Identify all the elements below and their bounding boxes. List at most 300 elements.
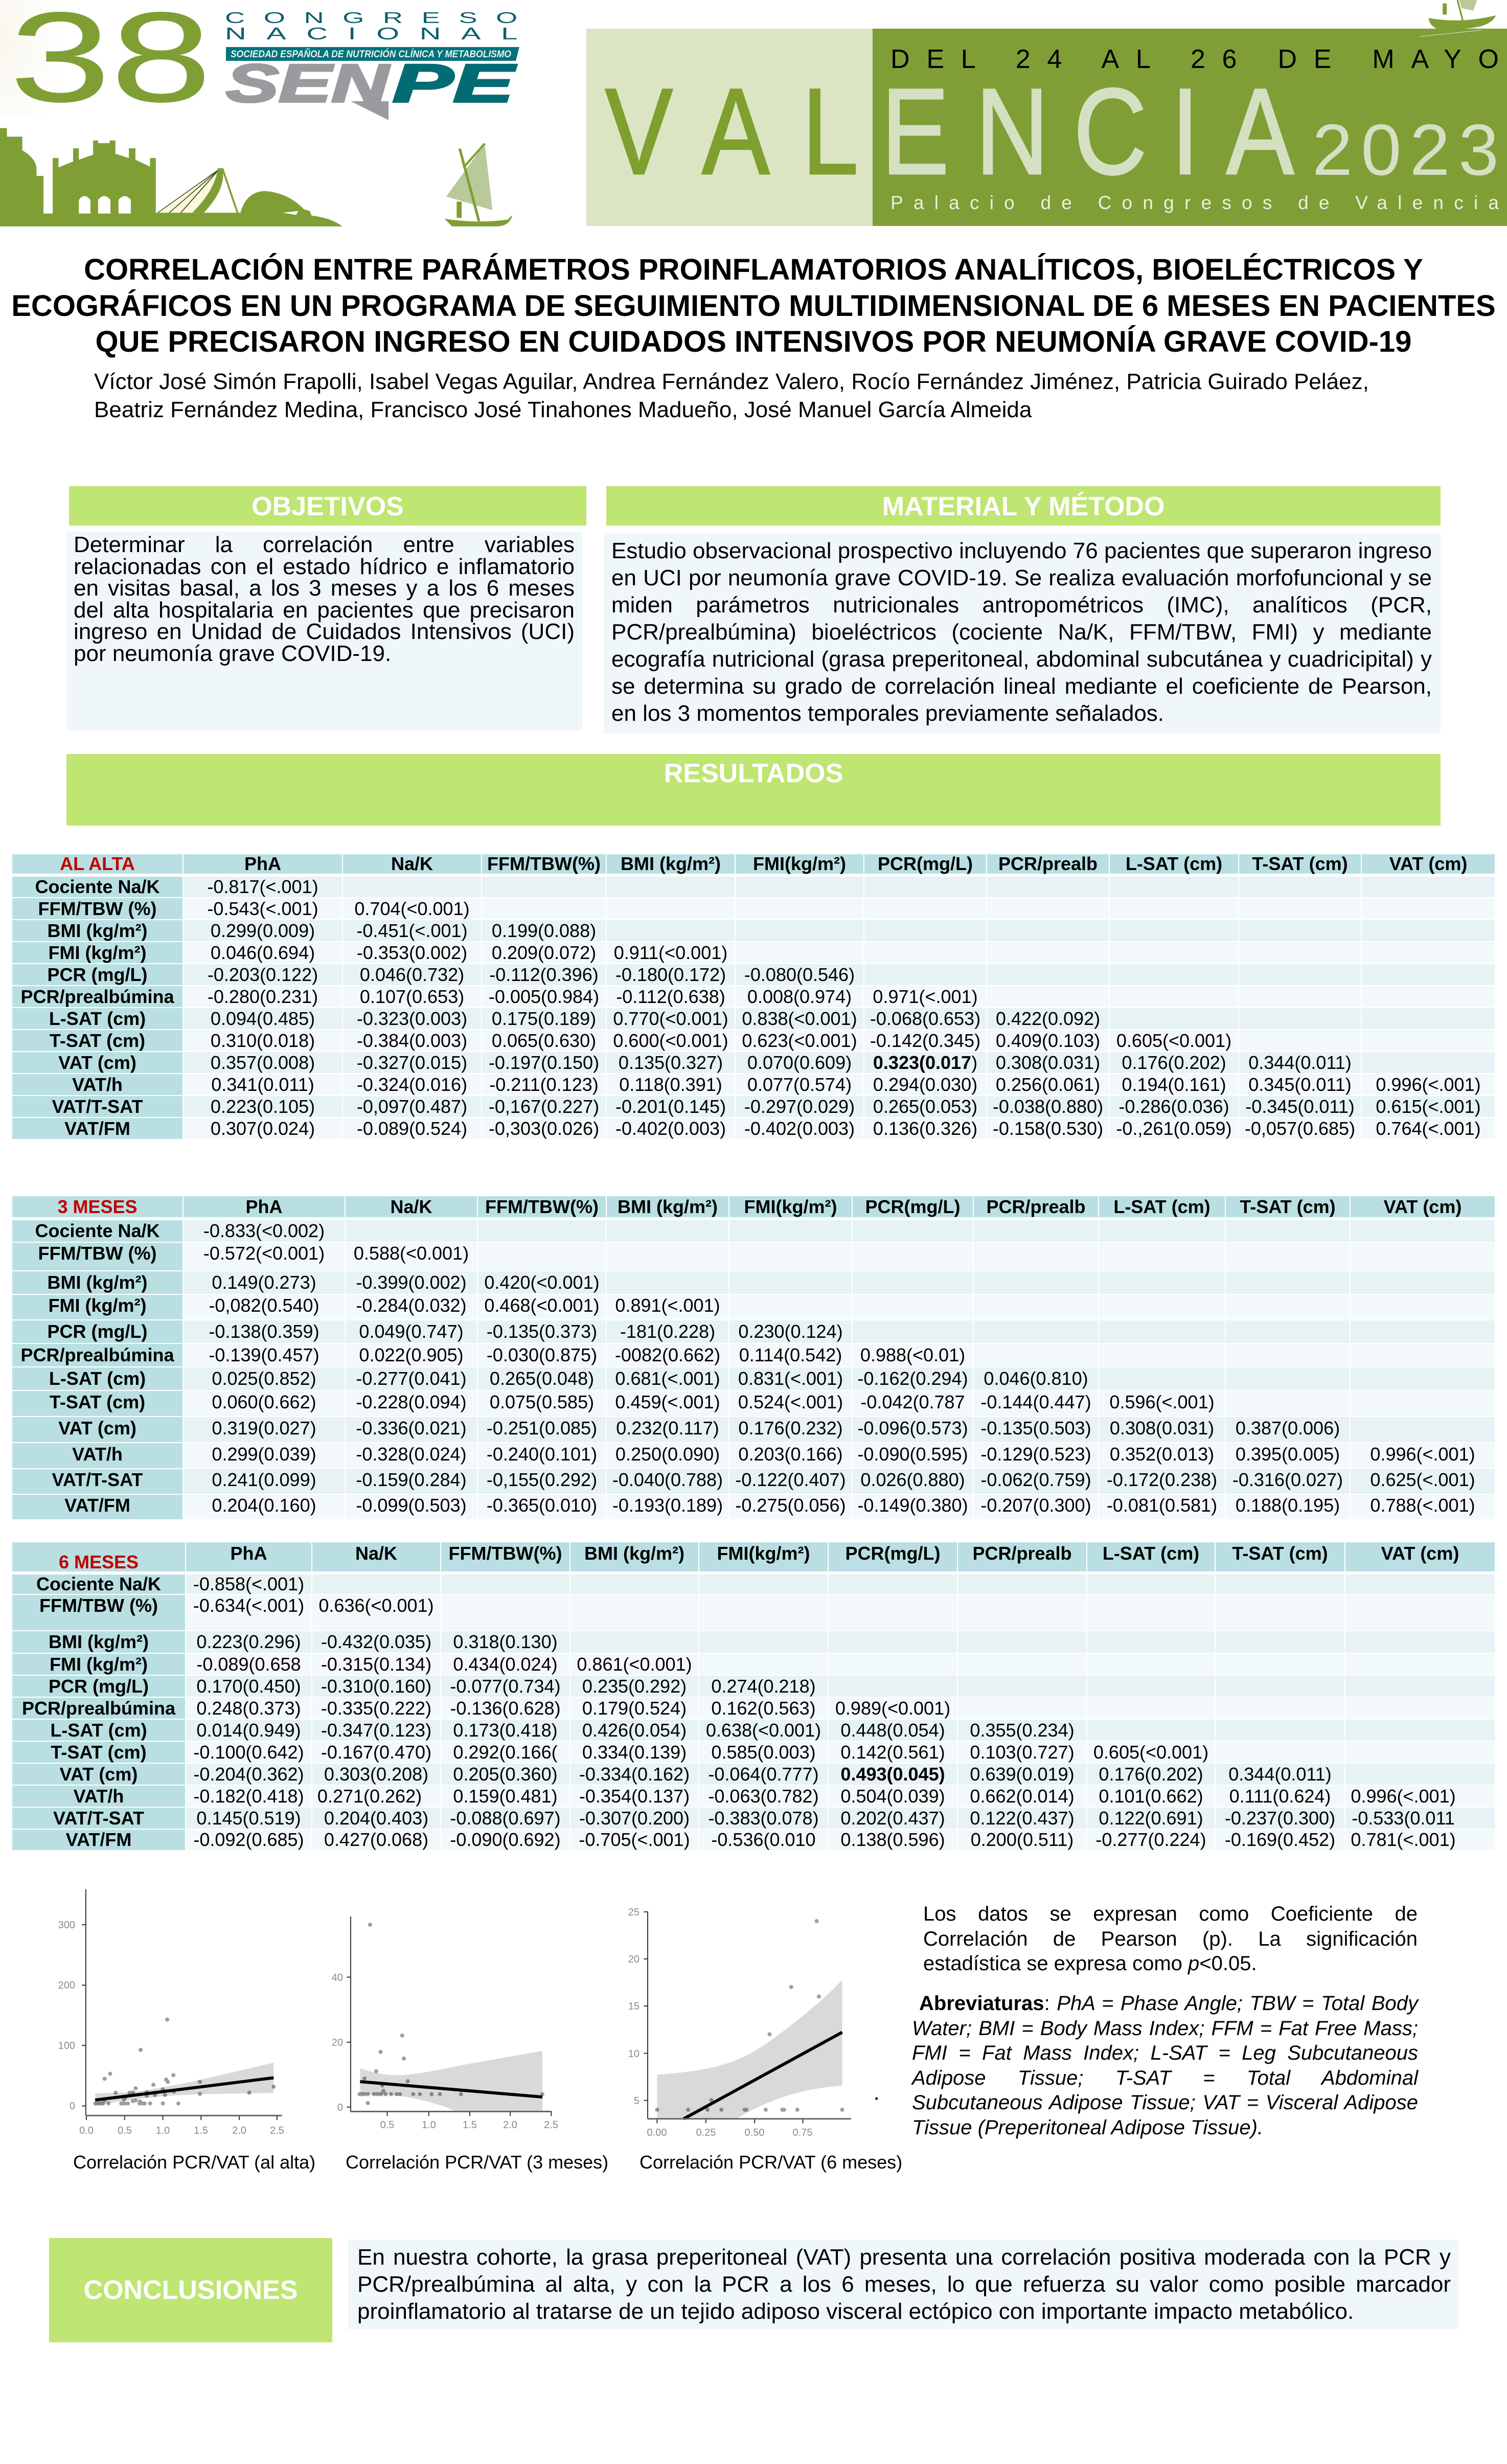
table: 6 meses: 0.638(<0.001) bbox=[706, 1720, 821, 1740]
panel: conclusiones text: En nuestra cohorte, la grasa preperitoneal (VAT) presenta una correlación positiva moderada con la PCR y bbox=[357, 2245, 1451, 2270]
table: 6 meses: -0.136(0.628) bbox=[450, 1697, 561, 1719]
table: al alta: 0.118(0.391) bbox=[619, 1074, 722, 1095]
chart: al alta: 2.5 bbox=[270, 2125, 284, 2136]
table: al alta: -0.817(<.001) bbox=[207, 876, 318, 897]
venue text: Palacio de Congresos de Valencia bbox=[890, 192, 1499, 213]
table: al alta: 0.256(0.061) bbox=[996, 1074, 1100, 1095]
table: 3 meses: 0.204(0.160) bbox=[212, 1495, 316, 1516]
table: 6 meses: -0.307(0.200) bbox=[579, 1808, 690, 1828]
table: 3 meses: -0.122(0.407) bbox=[735, 1469, 846, 1490]
table: 3 meses: 0.387(0.006) bbox=[1236, 1417, 1340, 1439]
table: 6 meses: VAT (cm) bbox=[1381, 1543, 1459, 1563]
table: 6 meses: 0.662(0.014) bbox=[970, 1785, 1075, 1807]
table: al alta: L-SAT (cm) bbox=[49, 1008, 146, 1029]
chart: al alta: 1.5 bbox=[194, 2125, 208, 2136]
panel: material y metodo text: en los 3 momentos temporales previamente señalados. bbox=[611, 701, 1164, 726]
table: 6 meses: 0.111(0.624) bbox=[1229, 1785, 1331, 1807]
table: 3 meses: -0.135(0.503) bbox=[980, 1417, 1091, 1439]
table: 6 meses: -0.237(0.300) bbox=[1225, 1808, 1335, 1828]
table: 6 meses: -0.705(<.001) bbox=[579, 1829, 690, 1850]
table: 3 meses: 0.114(0.542) bbox=[739, 1344, 842, 1365]
panel: material y metodo text: miden parámetros nutricionales antropométricos (IMC), analíticos (PCR, bbox=[611, 592, 1432, 618]
table: 3 meses: -0.062(0.759) bbox=[980, 1469, 1091, 1490]
table: 3 meses: 3 MESES bbox=[57, 1196, 138, 1217]
table: al alta: 0.971(<.001) bbox=[873, 986, 978, 1007]
table: 3 meses: -0.336(0.021) bbox=[356, 1417, 467, 1439]
table: 6 meses: 0.271(0.262) bbox=[317, 1785, 422, 1807]
table: al alta: FFM/TBW(%) bbox=[487, 853, 601, 874]
chart: 3 meses: 20 bbox=[332, 2037, 343, 2048]
table: 6 meses: PCR (mg/L) bbox=[49, 1676, 149, 1696]
chart caption: 6 meses: Correlación PCR/VAT (6 meses) bbox=[640, 2152, 902, 2173]
table: 3 meses: -0.172(0.238) bbox=[1107, 1469, 1217, 1490]
table: 6 meses: -0.077(0.734) bbox=[450, 1676, 561, 1696]
table: al alta: T-SAT (cm) bbox=[1252, 853, 1348, 874]
panel: material y metodo text: PCR/prealbúmina) bioeléctricos (cociente Na/K, FFM/TBW, FMI) y mediante bbox=[611, 620, 1432, 645]
table: al alta: VAT/h bbox=[72, 1074, 123, 1095]
table: 3 meses: -0,155(0.292) bbox=[487, 1469, 597, 1490]
chart: 3 meses: 0 bbox=[337, 2102, 343, 2113]
table: 6 meses: -0.090(0.692) bbox=[450, 1829, 561, 1850]
table: 3 meses: 0.459(<.001) bbox=[615, 1391, 720, 1412]
table: 3 meses: 0.230(0.124) bbox=[738, 1321, 843, 1342]
panel: objetivos text: del alta hospitalaria en pacientes que precisaron bbox=[74, 597, 575, 623]
note: abbreviations: Adipose Tissue; T-SAT = Total Abdominal bbox=[912, 2066, 1418, 2089]
table: al alta: -0.353(0.002) bbox=[357, 942, 467, 963]
table: al alta: -0.,261(0.059) bbox=[1116, 1117, 1232, 1139]
table: al alta: 0.070(0.609) bbox=[747, 1052, 852, 1073]
table: al alta: -0.038(0.880) bbox=[993, 1096, 1103, 1116]
VALENCIA title: VAL bbox=[605, 62, 858, 200]
table: 3 meses: 0.681(<.001) bbox=[615, 1368, 720, 1389]
chart: al alta: 1.0 bbox=[156, 2125, 170, 2136]
table: 6 meses: 6 MESES bbox=[59, 1551, 139, 1572]
table: al alta: -0,097(0.487) bbox=[357, 1096, 467, 1116]
table: 3 meses: 0.176(0.232) bbox=[738, 1417, 843, 1439]
note: data expression: Los datos se expresan como Coeficiente de bbox=[923, 1903, 1418, 1925]
table: 6 meses: VAT/FM bbox=[66, 1829, 131, 1850]
table: 6 meses: PhA bbox=[230, 1543, 267, 1563]
table: al alta: 0.422(0.092) bbox=[996, 1008, 1100, 1029]
table: al alta: 0.308(0.031) bbox=[996, 1052, 1100, 1073]
chart: 6 meses: 0.75 bbox=[793, 2127, 812, 2138]
table: al alta: -0,303(0.026) bbox=[489, 1117, 599, 1139]
table: 3 meses: VAT (cm) bbox=[58, 1417, 136, 1439]
table: al alta: -0.203(0.122) bbox=[208, 964, 318, 985]
table: 6 meses: -0.334(0.162) bbox=[579, 1764, 690, 1784]
table: 3 meses: 0.203(0.166) bbox=[738, 1444, 843, 1464]
table: 3 meses: -0.193(0.189) bbox=[612, 1495, 723, 1516]
chart: al alta: 0.5 bbox=[118, 2125, 132, 2136]
table: 6 meses: 0.334(0.139) bbox=[582, 1741, 687, 1763]
table: 6 meses: 0.138(0.596) bbox=[840, 1829, 945, 1850]
congreso nacional wordmark: CONGRESO bbox=[225, 9, 517, 27]
table: 6 meses: 0.303(0.208) bbox=[324, 1764, 428, 1784]
note: abbreviations bbox=[911, 1992, 1419, 2139]
SENPE logo bbox=[226, 54, 516, 120]
table: 3 meses: -0.099(0.503) bbox=[356, 1495, 467, 1516]
note: data expression bbox=[923, 1903, 1418, 1975]
table: 6 meses: -0.092(0.685) bbox=[193, 1829, 304, 1850]
table: 3 meses: 0.025(0.852) bbox=[212, 1368, 316, 1389]
table: al alta: 0.310(0.018) bbox=[211, 1030, 315, 1051]
table: 6 meses: Cociente Na/K bbox=[36, 1573, 161, 1594]
table: al alta: 0.107(0.653) bbox=[360, 986, 464, 1007]
table: al alta: -0.402(0.003) bbox=[615, 1117, 726, 1139]
table: 3 meses: T-SAT (cm) bbox=[50, 1391, 145, 1412]
table: al alta: 0.605(<0.001) bbox=[1116, 1030, 1231, 1051]
table: 6 meses: -0.063(0.782) bbox=[708, 1785, 819, 1807]
table: al alta: 0.341(0.011) bbox=[211, 1074, 314, 1095]
table: al alta: -0.297(0.029) bbox=[744, 1096, 855, 1116]
table: 6 meses: FMI(kg/m²) bbox=[717, 1543, 810, 1563]
table: al alta: 0.996(<.001) bbox=[1376, 1074, 1481, 1095]
table: 3 meses: 0.308(0.031) bbox=[1110, 1417, 1214, 1439]
table: al alta: -0.068(0.653) bbox=[870, 1008, 980, 1029]
table: al alta: 0.623(<0.001) bbox=[742, 1030, 857, 1051]
panel: objetivos text: ingreso en Unidad de Cuidados Intensivos (UCI) bbox=[74, 619, 575, 644]
table: 6 meses: VAT (cm) bbox=[60, 1764, 138, 1784]
table: 3 meses: PCR(mg/L) bbox=[865, 1196, 960, 1217]
table: 6 meses: 0.103(0.727) bbox=[970, 1741, 1075, 1763]
table: 3 meses: -0.135(0.373) bbox=[487, 1321, 597, 1342]
panel: material y metodo text: en UCI por neumonía grave COVID-19. Se realiza evaluación morfofuncional y se bbox=[611, 565, 1432, 590]
chart: al alta: 300 bbox=[58, 1920, 75, 1931]
table: 3 meses: FMI(kg/m²) bbox=[744, 1196, 837, 1217]
table: 3 meses: -0.040(0.788) bbox=[612, 1469, 723, 1490]
table: 3 meses: VAT (cm) bbox=[1384, 1196, 1462, 1217]
table: 6 meses: BMI (kg/m²) bbox=[584, 1543, 684, 1563]
table: 3 meses: -0.365(0.010) bbox=[487, 1495, 597, 1516]
table: al alta: Na/K bbox=[391, 853, 433, 874]
table: 6 meses: VAT/h bbox=[74, 1785, 124, 1807]
table: al alta: AL ALTA bbox=[60, 853, 135, 874]
title: ECOGRÁFICOS EN UN PROGRAMA DE SEGUIMIENTO MULTIDIMENSIONAL DE 6 MESES EN PACIENTES bbox=[11, 289, 1496, 322]
table: 6 meses: 0.426(0.054) bbox=[582, 1720, 687, 1740]
table: 3 meses: -0.207(0.300) bbox=[980, 1495, 1091, 1516]
table: 6 meses: -0.634(<.001) bbox=[193, 1595, 304, 1616]
table: 6 meses: 0.493(0.045) bbox=[840, 1764, 945, 1784]
table: 6 meses: -0.536(0.010 bbox=[711, 1829, 816, 1850]
table: al alta: 0.615(<.001) bbox=[1376, 1096, 1481, 1116]
table: 6 meses: 0.145(0.519) bbox=[196, 1808, 301, 1828]
table: 6 meses: 0.781(<.001) bbox=[1351, 1829, 1456, 1850]
table: 3 meses: 0.232(0.117) bbox=[616, 1417, 719, 1439]
table: 3 meses: L-SAT (cm) bbox=[49, 1368, 146, 1389]
table: al alta: 0.135(0.327) bbox=[619, 1052, 723, 1073]
header banner bbox=[0, 0, 1507, 226]
table: 6 meses: 0.989(<0.001) bbox=[835, 1697, 950, 1719]
panel: conclusiones text bbox=[348, 2240, 1458, 2329]
table: 6 meses: 0.122(0.437) bbox=[970, 1808, 1075, 1828]
table: 6 meses: FFM/TBW(%) bbox=[449, 1543, 562, 1563]
table: 6 meses: VAT/T-SAT bbox=[53, 1808, 144, 1828]
table: 3 meses: 0.588(<0.001) bbox=[354, 1243, 469, 1264]
table: 6 meses: 0.344(0.011) bbox=[1228, 1764, 1332, 1784]
table: 3 meses: 0.250(0.090) bbox=[615, 1444, 720, 1464]
table: 6 meses: 0.639(0.019) bbox=[970, 1764, 1075, 1784]
table: 6 meses: -0.088(0.697) bbox=[450, 1808, 561, 1828]
table: 3 meses: 0.265(0.048) bbox=[490, 1368, 594, 1389]
table: al alta: -0.142(0.345) bbox=[870, 1030, 980, 1051]
table: 6 meses bbox=[12, 1542, 1495, 1850]
table: al alta: 0.294(0.030) bbox=[873, 1074, 977, 1095]
note: abbreviations: Subcutaneous Adipose Tissue; VAT = Visceral Adipose bbox=[912, 2091, 1418, 2114]
table: 3 meses: -0.139(0.457) bbox=[209, 1344, 319, 1365]
table: 3 meses: FFM/TBW (%) bbox=[38, 1243, 156, 1264]
table: al alta: 0.409(0.103) bbox=[996, 1030, 1100, 1051]
table: 6 meses: 0.248(0.373) bbox=[196, 1697, 301, 1719]
panel: objetivos text: por neumonía grave COVID-19. bbox=[74, 641, 391, 666]
authors bbox=[94, 369, 1369, 422]
table: al alta: L-SAT (cm) bbox=[1126, 853, 1222, 874]
table: 6 meses: 0.202(0.437) bbox=[840, 1808, 945, 1828]
panel: objetivos text bbox=[66, 532, 582, 731]
table: 3 meses: FFM/TBW(%) bbox=[485, 1196, 599, 1217]
table: 3 meses: Cociente Na/K bbox=[35, 1220, 160, 1241]
chart: 3 meses: 0.5 bbox=[380, 2119, 394, 2131]
table: al alta: -0.080(0.546) bbox=[744, 964, 855, 985]
table: al alta: FMI (kg/m²) bbox=[48, 942, 146, 963]
table: 6 meses: 0.205(0.360) bbox=[453, 1764, 558, 1784]
heading: conclusiones bbox=[49, 2238, 332, 2342]
table: al alta: VAT (cm) bbox=[58, 1052, 136, 1073]
table: 6 meses: 0.427(0.068) bbox=[324, 1829, 428, 1850]
table: al alta: -0.384(0.003) bbox=[357, 1030, 467, 1051]
table: 3 meses: 0.395(0.005) bbox=[1236, 1444, 1340, 1464]
skyline illustration bbox=[0, 128, 342, 226]
table: al alta: -0.089(0.524) bbox=[357, 1117, 467, 1139]
note: data expression: estadística se expresa como p<0.05. bbox=[923, 1952, 1257, 1975]
table: 6 meses: BMI (kg/m²) bbox=[49, 1631, 149, 1652]
congreso nacional wordmark: NACIONAL bbox=[225, 24, 517, 43]
chart: 3 meses bbox=[332, 1917, 558, 2131]
table: al alta: VAT/FM bbox=[64, 1117, 130, 1139]
table: 3 meses: -0.240(0.101) bbox=[487, 1444, 597, 1464]
table: 6 meses: -0.858(<.001) bbox=[193, 1573, 304, 1594]
chart: al alta: 0.0 bbox=[79, 2125, 94, 2136]
authors: Beatriz Fernández Medina, Francisco José Tinahones Madueño, José Manuel García Almeida bbox=[94, 397, 1032, 422]
chart: 6 meses: 0.25 bbox=[696, 2127, 716, 2138]
table: 3 meses: -0.144(0.447) bbox=[980, 1391, 1091, 1412]
table: 6 meses: -0.432(0.035) bbox=[321, 1631, 431, 1652]
table: 6 meses: FMI (kg/m²) bbox=[50, 1653, 148, 1675]
table: 6 meses: 0.176(0.202) bbox=[1099, 1764, 1203, 1784]
congreso nacional wordmark bbox=[225, 9, 517, 43]
heading: conclusiones: CONCLUSIONES bbox=[84, 2275, 298, 2305]
note: data expression: Correlación de Pearson (p). La significación bbox=[923, 1927, 1418, 1950]
chart: 3 meses: 1.5 bbox=[463, 2119, 477, 2131]
table: al alta: 0.770(<0.001) bbox=[613, 1008, 728, 1029]
table: 6 meses: L-SAT (cm) bbox=[1103, 1543, 1199, 1563]
table: 3 meses: -0.833(<0.002) bbox=[203, 1220, 325, 1241]
chart: al alta: 100 bbox=[58, 2040, 75, 2051]
table: 6 meses: 0.142(0.561) bbox=[840, 1741, 945, 1763]
table: al alta: VAT (cm) bbox=[1389, 853, 1467, 874]
table: 6 meses: -0.182(0.418) bbox=[193, 1785, 304, 1807]
date and venue band bbox=[586, 0, 1507, 226]
table: 6 meses: 0.605(<0.001) bbox=[1093, 1741, 1208, 1763]
table: 6 meses: -0.354(0.137) bbox=[579, 1785, 690, 1807]
table: 6 meses: T-SAT (cm) bbox=[1232, 1543, 1328, 1563]
table: 3 meses: 0.188(0.195) bbox=[1236, 1495, 1340, 1516]
table: 3 meses: VAT/T-SAT bbox=[52, 1469, 143, 1490]
table: 6 meses: FFM/TBW (%) bbox=[39, 1595, 158, 1616]
table: 3 meses: 0.299(0.039) bbox=[212, 1444, 316, 1464]
table: al alta: T-SAT (cm) bbox=[50, 1030, 145, 1051]
table: 6 meses: 0.162(0.563) bbox=[711, 1697, 816, 1719]
title bbox=[11, 253, 1496, 358]
table: al alta: -0.451(<.001) bbox=[356, 920, 468, 941]
table: al alta: 0.838(<0.001) bbox=[742, 1008, 857, 1029]
table: al alta: -0,167(0.227) bbox=[489, 1096, 599, 1116]
table: al alta: -0.158(0.530) bbox=[993, 1117, 1103, 1139]
table: 6 meses: 0.159(0.481) bbox=[453, 1785, 558, 1807]
heading: objetivos bbox=[69, 486, 586, 526]
chart: al alta: 0 bbox=[70, 2101, 75, 2112]
chart: 6 meses: 0.50 bbox=[745, 2127, 764, 2138]
panel: material y metodo text: ecografía nutricional (grasa preperitoneal, abdominal subcutánea y cuadricipital) y bbox=[611, 647, 1432, 672]
heading: resultados bbox=[66, 754, 1441, 826]
table: 3 meses: L-SAT (cm) bbox=[1113, 1196, 1211, 1217]
note: abbreviations: FMI = Fat Mass Index; L-SAT = Leg Subcutaneous bbox=[912, 2042, 1418, 2064]
charts: correlación PCR/VAT bbox=[58, 1889, 902, 2173]
table: al alta: VAT/T-SAT bbox=[52, 1096, 143, 1116]
table: 3 meses: -0.081(0.581) bbox=[1107, 1495, 1217, 1516]
table: al alta: 0.136(0.326) bbox=[873, 1117, 977, 1139]
table: al alta: 0.199(0.088) bbox=[492, 920, 596, 941]
table: 6 meses: 0.504(0.039) bbox=[840, 1785, 945, 1807]
table: 3 meses: -0.277(0.041) bbox=[356, 1368, 467, 1389]
panel: conclusiones text: PCR/prealbúmina al alta, y con la PCR a los 6 meses, lo que refuerza su valor como posible marcador bbox=[357, 2272, 1451, 2297]
table: al alta: -0.197(0.150) bbox=[489, 1052, 599, 1073]
table: 3 meses: -0.275(0.056) bbox=[735, 1495, 846, 1516]
year: 2023 bbox=[1312, 109, 1499, 191]
table: 3 meses: 0.788(<.001) bbox=[1370, 1495, 1475, 1516]
table: al alta: -0.211(0.123) bbox=[489, 1074, 599, 1095]
table: 3 meses: 0.625(<.001) bbox=[1370, 1469, 1475, 1490]
table: al alta bbox=[12, 853, 1495, 1139]
table: al alta: 0.065(0.630) bbox=[492, 1030, 596, 1051]
table: 6 meses: 0.179(0.524) bbox=[582, 1697, 687, 1719]
table: al alta: -0.543(<.001) bbox=[207, 898, 318, 919]
table: al alta: -0,057(0.685) bbox=[1245, 1117, 1355, 1139]
table: al alta: -0.327(0.015) bbox=[357, 1052, 467, 1073]
table: 6 meses: -0.204(0.362) bbox=[193, 1764, 304, 1784]
table: al alta: PCR/prealbúmina bbox=[20, 986, 174, 1007]
table: 6 meses: 0.636(<0.001) bbox=[318, 1595, 434, 1616]
table: 6 meses: L-SAT (cm) bbox=[50, 1720, 147, 1740]
table: 6 meses: 0.014(0.949) bbox=[196, 1720, 301, 1740]
table: 3 meses: -181(0.228) bbox=[620, 1321, 715, 1342]
table: 6 meses: -0.383(0.078) bbox=[708, 1808, 819, 1828]
chart caption: al alta: Correlación PCR/VAT (al alta) bbox=[73, 2152, 315, 2173]
table: 3 meses: 0.891(<.001) bbox=[615, 1295, 720, 1316]
chart: 3 meses: 2.5 bbox=[544, 2119, 558, 2131]
table: 3 meses: BMI (kg/m²) bbox=[47, 1272, 147, 1293]
table: al alta: 0.764(<.001) bbox=[1376, 1117, 1481, 1139]
table: 3 meses: -0.284(0.032) bbox=[356, 1295, 467, 1316]
table: 3 meses: PhA bbox=[245, 1196, 282, 1217]
chart: 6 meses: 25 bbox=[628, 1907, 640, 1918]
table: 3 meses: PCR (mg/L) bbox=[47, 1321, 147, 1342]
table: 6 meses: -0.335(0.222) bbox=[321, 1697, 431, 1719]
chart: 3 meses: 2.0 bbox=[503, 2119, 517, 2131]
table: 3 meses: -0.129(0.523) bbox=[980, 1444, 1091, 1464]
table: al alta: PCR (mg/L) bbox=[47, 964, 147, 985]
table: 3 meses: -0.162(0.294) bbox=[857, 1368, 968, 1389]
table: 6 meses: -0.100(0.642) bbox=[193, 1741, 304, 1763]
table: 3 meses: Na/K bbox=[390, 1196, 432, 1217]
table: al alta: -0.201(0.145) bbox=[615, 1096, 726, 1116]
table: 3 meses: T-SAT (cm) bbox=[1240, 1196, 1336, 1217]
panel: objetivos text: relacionadas con el estado hídrico e inflamatorio bbox=[74, 554, 575, 579]
SENPE logo: PE bbox=[393, 54, 516, 113]
chart: al alta: 200 bbox=[58, 1980, 75, 1991]
table: 3 meses: -0.030(0.875) bbox=[487, 1344, 597, 1365]
table: 6 meses: -0.277(0.224) bbox=[1095, 1829, 1206, 1850]
table: 3 meses: 0.060(0.662) bbox=[212, 1391, 316, 1412]
table: 3 meses: -0.090(0.595) bbox=[857, 1444, 968, 1464]
table: al alta: -0.324(0.016) bbox=[357, 1074, 467, 1095]
chart: al alta bbox=[58, 1889, 284, 2136]
chart: al alta: 2.0 bbox=[232, 2125, 246, 2136]
table: al alta: 0.194(0.161) bbox=[1122, 1074, 1226, 1095]
panel: conclusiones text: proinflamatorio al tratarse de un tejido adiposo visceral ectópico con importante impacto metabólico. bbox=[357, 2299, 1354, 2324]
table: al alta: 0.176(0.202) bbox=[1122, 1052, 1226, 1073]
table: 6 meses: -0.347(0.123) bbox=[321, 1720, 431, 1740]
table: 6 meses: 0.434(0.024) bbox=[453, 1653, 558, 1675]
panel: material y metodo text: Estudio observacional prospectivo incluyendo 76 pacientes que superaron ingreso bbox=[611, 538, 1432, 563]
table: al alta: 0.175(0.189) bbox=[492, 1008, 596, 1029]
table: 3 meses: 0.319(0.027) bbox=[212, 1417, 316, 1439]
table: al alta: 0.307(0.024) bbox=[211, 1117, 315, 1139]
table: 3 meses: 0.022(0.905) bbox=[359, 1344, 464, 1365]
table: 3 meses: FMI (kg/m²) bbox=[48, 1295, 146, 1316]
table: 6 meses: 0.173(0.418) bbox=[453, 1720, 558, 1740]
chart: 6 meses: 5 bbox=[634, 2095, 640, 2107]
table: 6 meses: 0.585(0.003) bbox=[711, 1741, 816, 1763]
table: 3 meses: 0.996(<.001) bbox=[1370, 1444, 1475, 1464]
table: al alta: -0.112(0.396) bbox=[489, 964, 599, 985]
table: 3 meses: 0.524(<.001) bbox=[738, 1391, 843, 1412]
table: al alta: 0.600(<0.001) bbox=[613, 1030, 728, 1051]
table: 6 meses: 0.235(0.292) bbox=[582, 1676, 687, 1696]
chart: 3 meses: 1.0 bbox=[422, 2119, 436, 2131]
table: 3 meses: -0,082(0.540) bbox=[209, 1295, 319, 1316]
chart: 6 meses: 20 bbox=[628, 1954, 640, 1965]
chart: 6 meses bbox=[628, 1907, 877, 2138]
table: 3 meses: -0.042(0.787 bbox=[860, 1391, 965, 1412]
table: 6 meses: 0.448(0.054) bbox=[840, 1720, 945, 1740]
table: 6 meses: T-SAT (cm) bbox=[51, 1741, 147, 1763]
table: 3 meses: -0.251(0.085) bbox=[487, 1417, 597, 1439]
table: al alta: 0.046(0.732) bbox=[360, 964, 464, 985]
table: al alta: 0.094(0.485) bbox=[211, 1008, 315, 1029]
table: 6 meses: Na/K bbox=[355, 1543, 397, 1563]
table: al alta: 0.345(0.011) bbox=[1248, 1074, 1352, 1095]
table: 6 meses: 0.318(0.130) bbox=[453, 1631, 558, 1652]
table: 3 meses: PCR/prealb bbox=[986, 1196, 1086, 1217]
table: al alta: 0.323(0.017) bbox=[873, 1052, 977, 1073]
table: 6 meses: PCR(mg/L) bbox=[846, 1543, 940, 1563]
table: 6 meses: -0.533(0.011 bbox=[1352, 1808, 1455, 1828]
table: 6 meses: 0.861(<0.001) bbox=[577, 1653, 692, 1675]
table: 3 meses: 0.241(0.099) bbox=[212, 1469, 316, 1490]
table: 6 meses: -0.169(0.452) bbox=[1225, 1829, 1335, 1850]
table: 3 meses: -0.138(0.359) bbox=[209, 1321, 319, 1342]
table: 6 meses: 0.204(0.403) bbox=[324, 1808, 428, 1828]
